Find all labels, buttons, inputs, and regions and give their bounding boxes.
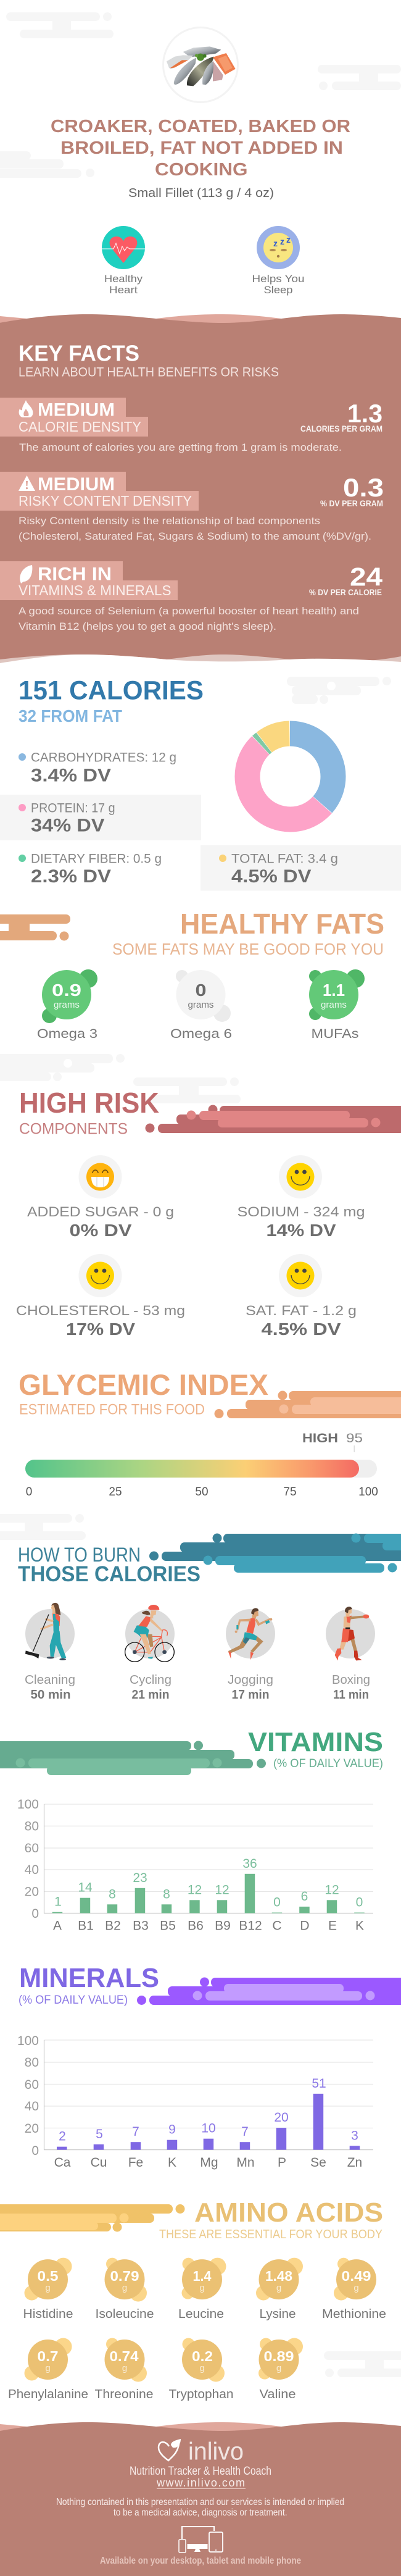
panel: calories	[0, 675, 401, 890]
amino: valine: 0.89	[264, 2348, 294, 2364]
subheading: ESTIMATED FOR THIS FOOD	[19, 1402, 205, 1418]
stat: carbohydrates	[19, 751, 176, 785]
amino: histidine	[23, 2258, 73, 2321]
bar chart: minerals: 9	[168, 2123, 176, 2137]
stat: sodium: SODIUM - 324 mg	[237, 1204, 365, 1219]
disclaimer	[56, 2497, 344, 2518]
glycemic gauge bar: 75	[283, 1486, 297, 1499]
stat: protein	[19, 801, 115, 836]
bar chart: vitamins: 8	[109, 1887, 116, 1901]
amino: lysine	[256, 2258, 303, 2321]
logo: inlivo	[159, 2438, 244, 2465]
bar chart: vitamins: 100	[17, 1797, 39, 1812]
bar chart: minerals: Mg	[200, 2156, 218, 2170]
activity: jogging	[226, 1608, 275, 1702]
amino: leucine	[178, 2258, 226, 2321]
amino: threonine: g	[122, 2363, 127, 2373]
heading: amino acids: AMINO ACIDS	[194, 2198, 383, 2228]
glycemic gauge bar: 100	[358, 1486, 378, 1499]
activity: cycling: Cycling	[130, 1673, 172, 1687]
stat: dietary fiber: 2.3% DV	[31, 866, 111, 887]
stat: omega 6: grams	[188, 1000, 213, 1010]
title: CROAKER, COATED, BAKED OR	[51, 117, 350, 136]
bar chart: vitamins	[17, 1797, 373, 1933]
stat: mufas: grams	[321, 1000, 347, 1010]
bar chart: vitamins: 36	[242, 1857, 257, 1871]
amino: isoleucine: Isoleucine	[95, 2307, 154, 2321]
bar chart: vitamins: 1	[54, 1895, 62, 1909]
title	[51, 117, 350, 180]
serving size: Small Fillet (113 g / 4 oz)	[128, 186, 274, 200]
benefit: helps you sleep: Sleep	[264, 284, 292, 296]
bar chart: minerals: 80	[25, 2055, 39, 2070]
bar chart: vitamins: B1	[78, 1919, 94, 1933]
amino: phenylalanine	[8, 2338, 88, 2401]
fact: calorie density	[0, 398, 382, 453]
glycemic value label: HIGH	[302, 1431, 338, 1445]
amino: leucine: g	[199, 2283, 205, 2293]
bar chart: minerals: 7	[132, 2125, 139, 2139]
stat: omega 3: 0.9	[52, 981, 81, 1000]
amino: threonine: Threonine	[95, 2388, 153, 2401]
fact: rich in vitamins and minerals: VITAMINS & MINERALS	[19, 582, 172, 598]
amino: tryptophan	[169, 2338, 233, 2401]
activity: cycling	[125, 1605, 175, 1702]
amino: valine	[258, 2338, 303, 2401]
bar chart: minerals: Zn	[347, 2156, 362, 2170]
bar chart: vitamins: A	[53, 1919, 62, 1933]
stat: cholesterol: 17% DV	[66, 1319, 135, 1339]
fact: calorie density: MEDIUM	[38, 400, 115, 420]
activity: jogging: 17 min	[232, 1688, 269, 1702]
bar chart: minerals	[17, 2034, 373, 2170]
bar chart: vitamins: 0	[356, 1896, 363, 1909]
subheading: components: COMPONENTS	[19, 1120, 128, 1137]
stat: protein: PROTEIN: 17 g	[31, 801, 115, 815]
amino: tryptophan: g	[199, 2363, 205, 2373]
bar chart: minerals: Cu	[91, 2156, 107, 2170]
fact: rich in vitamins and minerals: % DV PER CALORIE	[309, 587, 382, 597]
icon: fish photo in ring	[163, 27, 238, 102]
bar chart: minerals: 3	[351, 2128, 358, 2143]
amino: methionine: Methionine	[322, 2307, 386, 2321]
fact: calorie density: CALORIES PER GRAM	[300, 424, 382, 433]
bar chart: vitamins: B6	[188, 1919, 204, 1933]
amino: threonine	[95, 2338, 153, 2401]
amino: isoleucine: 0.79	[110, 2268, 139, 2284]
amino: lysine: Lysine	[259, 2307, 296, 2321]
subheading: LEARN ABOUT HEALTH BENEFITS OR RISKS	[19, 366, 279, 379]
bar chart: minerals: K	[168, 2156, 176, 2170]
website link: www.inlivo.com	[156, 2477, 245, 2489]
bar chart: vitamins: C	[272, 1919, 282, 1933]
title: BROILED, FAT NOT ADDED IN	[60, 138, 343, 158]
stat: cholesterol: CHOLESTEROL - 53 mg	[16, 1303, 185, 1318]
stat: carbohydrates: 3.4% DV	[31, 766, 111, 785]
disclaimer: to be a medical advice, diagnosis or treatment.	[114, 2507, 287, 2518]
benefit: helps you sleep: z	[280, 236, 284, 246]
bar chart: minerals: 10	[201, 2122, 216, 2136]
stat: dietary fiber: DIETARY FIBER: 0.5 g	[31, 852, 162, 866]
stat: omega 3: Omega 3	[37, 1027, 97, 1041]
activity: boxing: Boxing	[332, 1673, 370, 1687]
amino: lysine: 1.48	[265, 2268, 292, 2284]
stat: dietary fiber	[19, 852, 162, 887]
bar chart: minerals: 2	[59, 2129, 66, 2144]
amino: isoleucine	[95, 2258, 154, 2321]
panel: how to burn those calories	[18, 1534, 401, 1702]
amino: tryptophan: Tryptophan	[169, 2388, 233, 2401]
amino: valine: g	[276, 2363, 281, 2373]
benefit: helps you sleep: z	[286, 235, 291, 245]
subheading: THESE ARE ESSENTIAL FOR YOUR BODY	[159, 2228, 382, 2241]
heading: vitamins: VITAMINS	[248, 1727, 383, 1757]
stat: total fat: TOTAL FAT: 3.4 g	[231, 852, 338, 866]
benefit: healthy heart: Healthy	[104, 273, 143, 285]
subheading: SOME FATS MAY BE GOOD FOR YOU	[112, 940, 384, 958]
stat: saturated fat: SAT. FAT - 1.2 g	[246, 1303, 357, 1318]
panel: key facts	[0, 314, 401, 668]
glycemic value label	[302, 1431, 363, 1452]
fact: calorie density: The amount of calories you are getting from 1 gram is moderate.	[19, 441, 342, 453]
amino: methionine: g	[353, 2283, 359, 2293]
panel: healthy fats	[0, 908, 384, 1041]
bar chart: minerals: Se	[310, 2156, 326, 2170]
activity: boxing: 11 min	[333, 1688, 369, 1702]
stat: saturated fat: 4.5% DV	[262, 1319, 341, 1339]
amino: phenylalanine: 0.7	[37, 2348, 58, 2364]
bar chart: minerals: 100	[17, 2034, 39, 2048]
stat: omega 3: grams	[54, 1000, 80, 1010]
bar chart: vitamins: B9	[215, 1919, 231, 1933]
bar chart: minerals: 20	[25, 2122, 39, 2136]
subheading: (% OF DAILY VALUE)	[19, 1994, 128, 2007]
activity: jogging: Jogging	[228, 1673, 273, 1687]
amino: phenylalanine: Phenylalanine	[8, 2388, 88, 2401]
heading: those calories: THOSE CALORIES	[18, 1562, 200, 1586]
availability note: Available on your desktop, tablet and mobile phone	[100, 2556, 301, 2566]
amino: histidine: Histidine	[23, 2307, 73, 2321]
stat: added sugar: 0% DV	[69, 1221, 132, 1240]
amino: phenylalanine: g	[45, 2363, 51, 2373]
bar chart: vitamins: D	[300, 1919, 310, 1933]
heading: minerals: MINERALS	[19, 1963, 159, 1993]
glycemic gauge bar: 0	[26, 1486, 32, 1499]
bar chart: vitamins: 12	[188, 1883, 202, 1897]
fact: rich in vitamins and minerals	[0, 561, 383, 632]
bar chart: vitamins: 0	[273, 1896, 281, 1909]
bar chart: vitamins: 14	[78, 1881, 93, 1895]
bar chart: minerals: Mn	[236, 2156, 255, 2170]
bar chart: vitamins: B5	[160, 1919, 176, 1933]
bar chart: minerals: Fe	[128, 2156, 143, 2170]
stat: omega 6: 0	[195, 981, 206, 1000]
icon: warning	[19, 475, 35, 491]
icon: leaf	[20, 565, 32, 583]
stat: protein: 34% DV	[31, 815, 105, 836]
benefit: helps you sleep: z	[273, 238, 278, 248]
bar chart: vitamins: B3	[133, 1919, 149, 1933]
fact: calorie density: 1.3	[347, 399, 382, 428]
stat: omega 3	[37, 969, 97, 1041]
glycemic gauge bar: 25	[109, 1486, 122, 1499]
icon: flame	[19, 400, 33, 417]
bar chart: minerals: 7	[241, 2125, 249, 2139]
panel: high risk components	[16, 1087, 401, 1339]
panel: minerals	[17, 1963, 401, 2170]
heading: key facts: KEY FACTS	[19, 341, 139, 366]
stat: sodium	[237, 1155, 365, 1240]
activity: cleaning: Cleaning	[25, 1673, 75, 1687]
stat: cholesterol	[16, 1254, 185, 1339]
fact: rich in vitamins and minerals: Vitamin B12 (helps you to get a good night's sleep).	[19, 621, 276, 632]
donut chart	[247, 734, 333, 819]
bar chart: minerals: Ca	[54, 2156, 71, 2170]
stat: added sugar: ADDED SUGAR - 0 g	[27, 1204, 174, 1219]
amino: threonine: 0.74	[110, 2348, 139, 2364]
panel: glycemic index	[19, 1368, 401, 1499]
glycemic value label: 95	[346, 1431, 363, 1445]
amino: tryptophan: 0.2	[192, 2348, 213, 2364]
panel: footer	[0, 2422, 401, 2576]
fact: rich in vitamins and minerals: 24	[350, 562, 383, 592]
fact: risky content density: Risky Content density is the relationship of bad components	[19, 515, 320, 527]
bar chart: minerals: 60	[25, 2078, 39, 2092]
disclaimer: Nothing contained in this presentation and our services is intended or implied	[56, 2497, 344, 2507]
fact: calorie density: CALORIE DENSITY	[19, 419, 141, 435]
icon: devices	[179, 2527, 223, 2553]
bar chart: vitamins: 60	[25, 1841, 39, 1855]
stat: mufas: 1.1	[323, 981, 345, 1000]
fact: rich in vitamins and minerals: RICH IN	[38, 564, 112, 584]
amino: valine: Valine	[259, 2388, 296, 2401]
subheading: from fat: 32 FROM FAT	[19, 706, 122, 726]
fact: rich in vitamins and minerals: A good source of Selenium (a powerful booster of heart health) and	[19, 605, 359, 617]
bar chart: vitamins: 23	[133, 1871, 147, 1885]
bar chart: vitamins: K	[355, 1919, 364, 1933]
amino: isoleucine: g	[122, 2283, 127, 2293]
stat: saturated fat	[246, 1254, 357, 1339]
panel: vitamins	[0, 1727, 383, 1933]
amino: leucine: 1.4	[192, 2268, 212, 2284]
stat: total fat: 4.5% DV	[231, 866, 311, 887]
bar chart: minerals: 51	[312, 2076, 326, 2091]
amino: leucine: Leucine	[178, 2307, 224, 2321]
fact: risky content density	[0, 472, 384, 542]
benefit: healthy heart	[102, 226, 145, 296]
bar chart: vitamins: 8	[163, 1887, 170, 1901]
stat: omega 6	[170, 970, 232, 1041]
amino: histidine: 0.5	[37, 2268, 59, 2284]
activity: boxing	[326, 1607, 375, 1702]
fact: risky content density: 0.3	[343, 473, 384, 502]
bar chart: vitamins: B2	[105, 1919, 121, 1933]
activity: cleaning	[25, 1603, 75, 1702]
bar chart: vitamins: 40	[25, 1863, 39, 1877]
amino: histidine: g	[45, 2283, 51, 2293]
amino: lysine: g	[276, 2283, 281, 2293]
heading: high risk: HIGH RISK	[19, 1087, 159, 1119]
amino: methionine	[322, 2258, 386, 2321]
bar chart: vitamins: 6	[301, 1889, 308, 1904]
bar chart: minerals: 20	[274, 2110, 289, 2125]
glycemic gauge bar	[25, 1460, 378, 1499]
bar chart: vitamins: 20	[25, 1884, 39, 1899]
bar chart: vitamins: E	[328, 1919, 337, 1933]
benefit: helps you sleep	[252, 226, 305, 296]
activity: cycling: 21 min	[132, 1688, 169, 1702]
panel: amino acids	[0, 2198, 386, 2401]
fact: risky content density: RISKY CONTENT DENSITY	[19, 493, 192, 509]
heading: healthy fats: HEALTHY FATS	[180, 908, 384, 940]
stat: sodium: 14% DV	[267, 1221, 336, 1240]
heading: how to burn: HOW TO BURN	[18, 1544, 141, 1566]
stat: mufas	[309, 969, 365, 1041]
bar chart: minerals: 0	[31, 2144, 39, 2158]
stat: carbohydrates: CARBOHYDRATES: 12 g	[31, 751, 176, 764]
stat: mufas: MUFAs	[311, 1027, 359, 1041]
bar chart: vitamins: 12	[325, 1883, 339, 1897]
logo: inlivo: inlivo	[188, 2438, 244, 2465]
bar chart: minerals: P	[278, 2156, 286, 2170]
stat: added sugar	[27, 1155, 174, 1240]
heading: glycemic index: GLYCEMIC INDEX	[19, 1368, 268, 1401]
stat: total fat	[219, 852, 338, 887]
bar chart: vitamins: 0	[31, 1907, 39, 1921]
heading: 151 calories: 151 CALORIES	[19, 675, 204, 705]
tagline: Nutrition Tracker & Health Coach	[130, 2465, 271, 2478]
fact: risky content density: % DV PER GRAM	[320, 498, 383, 508]
bar chart: vitamins: 12	[215, 1883, 229, 1897]
amino: methionine: 0.49	[342, 2268, 371, 2284]
bar chart: minerals: 40	[25, 2099, 39, 2114]
stat: omega 6: Omega 6	[170, 1027, 232, 1041]
bar chart: minerals: 5	[96, 2127, 103, 2141]
benefit: helps you sleep: Helps You	[252, 273, 305, 285]
bar chart: vitamins: B12	[239, 1919, 262, 1933]
bar chart: vitamins: 80	[25, 1819, 39, 1833]
activity: cleaning: 50 min	[31, 1688, 70, 1702]
fact: risky content density: MEDIUM	[38, 474, 115, 495]
benefit: healthy heart: Heart	[109, 284, 138, 296]
subheading: (% OF DAILY VALUE)	[273, 1757, 383, 1770]
glycemic gauge bar: 50	[195, 1486, 209, 1499]
fact: risky content density: (Cholesterol, Saturated Fat, Sugars & Sodium) to the amount (%DV/gr).	[19, 530, 371, 542]
title: COOKING	[155, 160, 248, 180]
